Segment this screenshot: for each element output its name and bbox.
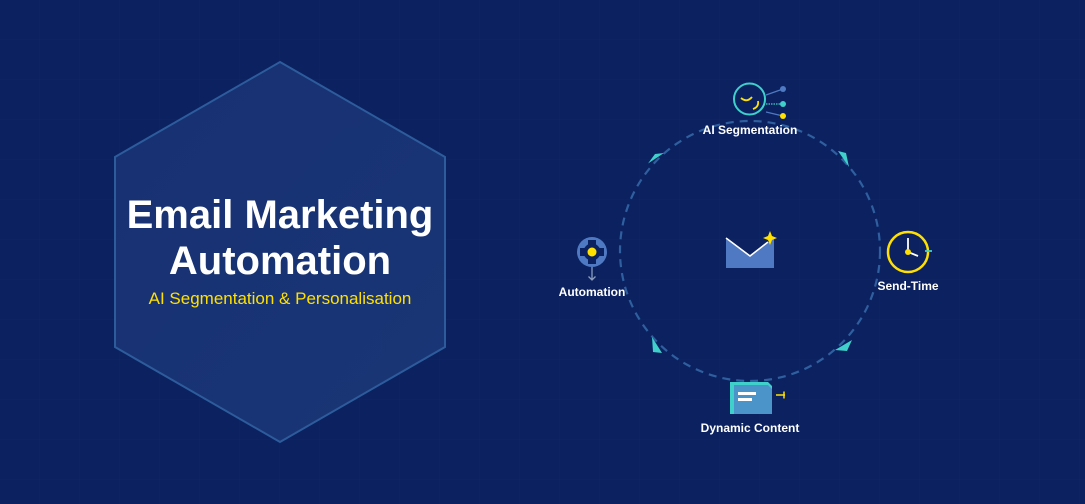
node: Automation: [559, 237, 625, 299]
icon: AI segmentation: [734, 84, 786, 119]
panel: title hexagon: [115, 62, 445, 442]
arrow: lower left: [652, 337, 662, 353]
label: Send-Time: [877, 279, 939, 293]
dashed cycle ring: [620, 121, 880, 381]
label: AI Segmentation: [703, 123, 797, 137]
icon: gear with arrow: [577, 237, 607, 280]
subtitle: AI Segmentation & Personalisation: [149, 289, 411, 308]
label: Dynamic Content: [701, 421, 799, 435]
label: Automation: [559, 285, 625, 299]
node: Dynamic Content: [701, 382, 799, 435]
node: Send-Time: [877, 232, 939, 293]
icon: central envelope with sparkle: [726, 231, 777, 268]
icon: document: [730, 382, 785, 414]
icon: clock: [888, 232, 932, 272]
arrow: upper right: [838, 151, 849, 167]
arrow: upper left: [648, 153, 664, 164]
arrow: lower right: [835, 340, 852, 351]
title line two: Automation: [169, 239, 391, 283]
node: AI Segmentation: [703, 84, 797, 137]
title: Email Marketing: [127, 193, 433, 237]
